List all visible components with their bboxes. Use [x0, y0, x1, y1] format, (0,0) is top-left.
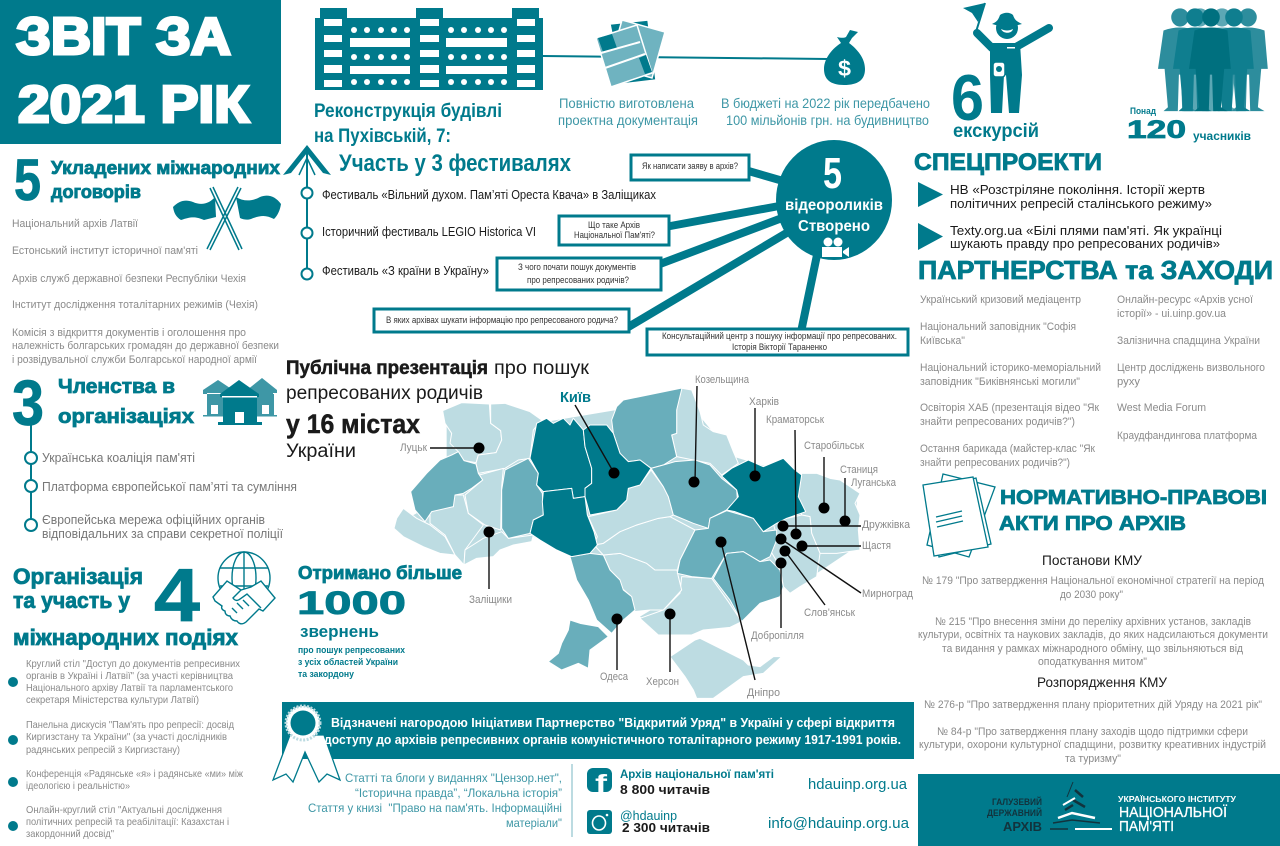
text: Texty project [950, 223, 1222, 251]
label: appeals: звернень [300, 622, 379, 641]
text: national memory institute: ПАМ'ЯТІ [1119, 818, 1174, 835]
number: 3: 3 [12, 367, 44, 439]
panel: festivals [283, 145, 656, 280]
map city labels: Станиця [840, 464, 878, 476]
video box 4 [374, 309, 629, 332]
heading: agreements [51, 158, 280, 202]
banner: award: доступу до архівів репресивних органів комуністичного тоталітарного режиму 1917-1991 років. [324, 733, 901, 747]
text: NV project [950, 182, 1212, 211]
list: events: Панельна дискусія "Пам'ять про репресії: досвід [26, 719, 234, 731]
text: facebook stats: 8 800 читачів [620, 783, 710, 797]
title panel: 2021 РІК [18, 76, 249, 134]
list: festivals: Фестиваль «З країни в Україну» [322, 263, 489, 278]
list: agreements: і розвідувальної служби Болгарської народної армії [12, 354, 257, 366]
text: state archive: ГАЛУЗЕВИЙ [992, 796, 1042, 808]
list: partners right: Онлайн-ресурс «Архів усної [1117, 294, 1253, 306]
list: memberships: Європейська мережа офіційних органів [42, 512, 265, 527]
text: project documentation: Повністю виготовлена [559, 95, 694, 111]
text: state archive: ДЕРЖАВНИЙ [987, 807, 1042, 819]
heading: reconstruction: на Пухівській, 7: [314, 126, 451, 147]
video box 2: Що таке Архів [588, 220, 640, 230]
icon: money bag: $ [838, 56, 851, 81]
icon: tree timeline [283, 145, 331, 280]
text: NV project: НВ «Розстріляне покоління. Історії жертв [950, 182, 1205, 197]
map city labels: Слов'янськ [804, 607, 855, 619]
video box 5: Консультаційний центр з пошуку інформації про репресованих. [662, 331, 897, 341]
list: partners right [1117, 294, 1265, 442]
heading: public presentation: у 16 містах [286, 409, 420, 439]
map of Ukraine [394, 374, 914, 699]
label: excursions: екскурсій [953, 121, 1039, 142]
map city labels: Старобільськ [804, 440, 864, 452]
video box 3: про репресованих родичів? [527, 275, 629, 285]
list: agreements: Інститут дослідження тоталітарних режимів (Чехія) [12, 299, 258, 311]
list: agreements: Естонський інститут історичної пам'яті [12, 245, 198, 257]
map regions [394, 388, 860, 698]
map city labels: Луганська [851, 477, 897, 489]
list: partners right: руху [1117, 376, 1141, 388]
label: participants: учасників [1193, 129, 1251, 143]
list: partners left: знайти репресованих родичів?") [920, 457, 1070, 469]
label: more than: Понад [1130, 106, 1156, 117]
text: project documentation: проектна документація [558, 112, 698, 128]
map city labels: Харків [749, 396, 779, 408]
panel: excursions [951, 3, 1049, 142]
text: articles and blogs: матеріали" [506, 816, 562, 830]
text: instagram stats [620, 808, 710, 835]
list: partners left: знайти репресованих родичів?") [920, 416, 1075, 428]
icon: facebook [587, 768, 612, 798]
panel: appeals [297, 563, 462, 680]
heading: received more than: Отримано більше [298, 563, 462, 583]
list: memberships: відповідальних за справи секретної поліції [42, 526, 283, 541]
map city labels: Дружківка [862, 519, 911, 531]
icon: documents [596, 20, 665, 87]
list: memberships: Платформа європейської пам’яті та сумління [42, 479, 297, 494]
text: Texty project: Texty.org.ua «Білі плями пам'яті. Як українці [950, 223, 1222, 238]
list: festivals [322, 187, 656, 278]
list: events: секретаря Міністерства культури Латвії) [26, 694, 199, 706]
title panel [0, 0, 281, 144]
heading: normative acts: АКТИ ПРО АРХІВ [999, 513, 1186, 535]
map city labels: Одеса [600, 671, 629, 683]
panel: social media [587, 768, 910, 835]
list: resolutions: № 179 "Про затвердження Національної економічної стратегії на період [922, 575, 1265, 587]
text: instagram stats: @hdauinp [620, 808, 677, 823]
map city labels: Козельщина [695, 374, 750, 386]
list: events: радянських репресій з Киргизстану) [26, 744, 180, 756]
heading: normative acts [999, 487, 1267, 535]
text: national memory institute: УКРАЇНСЬКОГО ІНСТИТУТУ [1118, 794, 1237, 804]
text: instagram stats: 2 300 читачів [622, 821, 710, 835]
panel: normative acts [918, 474, 1268, 765]
circle: five videos [776, 140, 892, 260]
list: agreements: Національний архів Латвії [12, 218, 138, 230]
text: budget [721, 95, 930, 128]
list: events: Конференція «Радянське «я» і радянське «ми» між [26, 768, 243, 780]
icon: money bag [824, 30, 865, 85]
heading: special projects: СПЕЦПРОЕКТИ [914, 149, 1102, 176]
video box 5: Історія Вікторії Тараненко [732, 342, 827, 352]
list: partners left: Український кризовий медіацентр [920, 294, 1081, 306]
heading: festivals: Участь у 3 фестивалях [339, 150, 572, 177]
text: state archive: АРХІВ [1003, 819, 1042, 834]
heading: public presentation: репресованих родичів [286, 383, 483, 404]
subheading: orders: Розпорядження КМУ [1037, 675, 1167, 690]
panel: partnerships [918, 255, 1273, 469]
list: orders: культури, охорони культурної спадщини, розвитку креативних індустрій [919, 739, 1266, 751]
subheading: resolutions: Постанови КМУ [1042, 553, 1142, 568]
text: articles and blogs: Стаття у книзі "Право на пам'ять. Інформаційні [308, 801, 562, 815]
map leader lines [430, 386, 861, 680]
list: events: Круглий стіл "Доступ до документів репресивних [26, 658, 241, 670]
icon: papers [923, 474, 995, 557]
list: resolutions: до 2030 року" [1060, 589, 1123, 601]
list: resolutions: та видання у рамках міжнародного обміну, що звільняються від [942, 643, 1244, 655]
heading: agreements: Укладених міжнародних [51, 158, 280, 178]
heading: events: міжнародних подіях [13, 625, 239, 650]
number: 5: 5 [14, 148, 41, 213]
number: 1000: 1000 [297, 585, 406, 621]
panel: international agreements [12, 148, 281, 366]
list: agreements: належність болгарських громадян до державної безпеки [12, 340, 279, 352]
map city labels: Краматорськ [766, 414, 824, 426]
list: events: ідеологією і реальністю» [26, 780, 130, 792]
note: appeals: та закордону [298, 669, 355, 680]
text: state archive [987, 796, 1042, 834]
text: email: info@hdauinp.org.ua [768, 815, 910, 832]
heading: events: та участь у [13, 588, 131, 613]
map city labels: Добропілля [751, 630, 804, 642]
icon: globe and handshake [213, 552, 275, 624]
map city labels: Заліщики [469, 594, 512, 606]
list: partners left: Освіторія ХАБ (презентація відео "Як [920, 402, 1099, 414]
list: events: закордонний досвід" [26, 828, 114, 840]
footer: institutions logo [918, 774, 1280, 846]
text: budget: 100 мільйонів грн. на будивництво [726, 112, 929, 128]
map city labels: Херсон [646, 676, 679, 688]
heading: reconstruction [314, 101, 502, 147]
list: resolutions [918, 575, 1268, 668]
list: partners left: Національний історико-меморіальний [920, 362, 1101, 374]
list: partners left: Остання барикада (майстер-клас "Як [920, 443, 1095, 455]
heading: public presentation: про пошук [494, 358, 590, 379]
video box 4: В яких архівах шукати інформацію про репресованого родича? [386, 315, 618, 325]
icon: facebook: f [595, 770, 608, 798]
icon: building [315, 8, 543, 90]
circle: five videos: відеороликів [785, 197, 883, 214]
icon: crowd of people [1158, 8, 1268, 111]
heading: partnerships: ПАРТНЕРСТВА та ЗАХОДИ [918, 255, 1273, 285]
list: agreements: Комісія з відкриття документів і оголошення про [12, 327, 246, 339]
heading: public presentation: України [286, 441, 356, 462]
text: website: hdauinp.org.ua [808, 776, 908, 793]
panel: international events [8, 552, 275, 840]
list: partners left [920, 294, 1101, 469]
list: events: органів в Україні і Латвії" (за участі керівництва [26, 670, 233, 682]
banner: award [273, 702, 914, 782]
icon: instagram [587, 810, 612, 834]
heading: memberships: Членства в [58, 376, 175, 398]
heading: memberships: організаціях [58, 406, 194, 428]
list: resolutions: оподаткування митом" [1038, 656, 1147, 668]
heading: normative acts: НОРМАТИВНО-ПРАВОВІ [1000, 487, 1267, 509]
list: agreements: Архів служб державної безпеки Республіки Чехія [12, 273, 246, 285]
list: resolutions: № 215 "Про внесення зміни до переліку архівних установ, закладів [935, 616, 1251, 628]
icon: houses [203, 378, 277, 425]
list: events: Киргизстану та України" (за участі дослідників [26, 731, 227, 743]
list: memberships: Українська коаліція пам'яті [42, 450, 195, 465]
list: festivals: Фестиваль «Вільний духом. Пам’яті Ореста Квача» в Заліщиках [322, 187, 656, 202]
text: national memory institute: НАЦІОНАЛЬНОЇ [1119, 804, 1228, 821]
icon: triangle [918, 182, 943, 207]
number: 120: 120 [1127, 116, 1186, 144]
list: memberships [42, 450, 297, 541]
panel: videos [374, 140, 908, 355]
list: orders [919, 699, 1266, 765]
panel: memberships [12, 367, 297, 541]
map city labels: Дніпро [747, 687, 780, 699]
panel: participants [1127, 8, 1268, 144]
list: festivals: Історичний фестиваль LEGIO Historica VI [322, 224, 536, 239]
note: appeals: з усіх областей України [298, 657, 398, 668]
circle: five videos: Створено [798, 218, 870, 235]
list: agreements [12, 218, 279, 366]
note: appeals [298, 645, 406, 680]
text: articles and blogs: “Історична правда”, “Локальна історія” [355, 786, 562, 800]
list: events [8, 658, 243, 840]
list: events: Онлайн-круглий стіл "Актуальні дослідження [26, 804, 222, 816]
list: partners right: Краудфандингова платформа [1117, 430, 1258, 442]
map city labels: Луцьк [400, 442, 427, 454]
timeline: memberships [25, 420, 37, 531]
video box 1: Як написати заяву в архів? [642, 161, 738, 171]
icon: triangle [918, 223, 943, 250]
map city labels: Київ [560, 389, 591, 406]
list: orders: № 84-р "Про затвердження плану заходів щодо підтримки сфери [937, 726, 1248, 738]
video box 1 [631, 155, 749, 180]
text: facebook stats [620, 769, 774, 797]
text: project documentation [558, 95, 698, 128]
number: 6: 6 [951, 61, 984, 134]
text: NV project: політичних репресій сталінського режиму» [950, 196, 1212, 211]
text: articles and blogs [308, 771, 562, 830]
text: national memory institute [1118, 794, 1237, 835]
video box 5 [647, 329, 908, 355]
list: partners left: Київська" [920, 335, 965, 347]
text: facebook stats: Архів національної пам'яті [620, 769, 774, 781]
text: Texty project: шукають правду про репресованих родичів» [950, 236, 1220, 251]
title panel: ЗВІТ ЗА [16, 8, 231, 66]
list: events: Національного архіву Латвії та парламентського [26, 682, 233, 694]
heading: memberships [58, 376, 194, 428]
text: budget: В бюджеті на 2022 рік передбачено [721, 95, 930, 111]
heading: public presentation [286, 358, 590, 462]
list: partners right: історії» - ui.uinp.gov.ua [1117, 308, 1227, 320]
video box 3 [497, 258, 661, 290]
banner: award: Відзначені нагородою Ініціативи Партнерство "Відкритий Уряд" в Україні у сфері відкриття [331, 716, 895, 730]
map city labels: Щастя [862, 540, 891, 552]
panel: special projects [914, 149, 1222, 251]
map city labels [400, 374, 914, 699]
icon: ribbon medal [273, 706, 340, 782]
heading: public presentation: Публічна презентація [286, 358, 488, 379]
heading: events [13, 564, 239, 650]
list: partners right: West Media Forum [1117, 402, 1206, 414]
list: events: політичних репресій та реабілітації: Казахстан і [26, 816, 229, 828]
list: orders: № 276-р "Про затвердження плану пріоритетних дій Уряду на 2021 рік" [924, 699, 1262, 711]
heading: agreements: договорів [51, 182, 141, 202]
heading: events: Організація [13, 564, 143, 589]
list: partners left: Національний заповідник "Софія [920, 321, 1076, 333]
list: partners right: Залізнична спадщина України [1117, 335, 1260, 347]
map city labels: Мирноград [862, 588, 914, 600]
icon: logo tree [1050, 782, 1112, 829]
heading: reconstruction: Реконструкція будівлі [314, 101, 502, 122]
video box 2: Національної Пам'яті? [574, 230, 655, 240]
number: 4: 4 [154, 553, 200, 637]
map city dots [474, 442, 850, 624]
video box 3: З чого почати пошук документів [518, 262, 636, 272]
video box 2 [559, 216, 669, 245]
circle: five videos: 5 [823, 149, 842, 198]
panel: reconstruction of the building [314, 8, 930, 147]
icon: crossed flags [173, 187, 281, 250]
text: articles and blogs: Статті та блоги у виданнях "Цензор.нет", [345, 771, 562, 785]
list: partners right: Центр досліджень визвольного [1117, 362, 1265, 374]
icon: guide figure [963, 3, 1049, 113]
icon: film camera [822, 238, 849, 257]
list: partners left: заповідник "Биківнянські могили" [920, 376, 1080, 388]
connector spokes [625, 170, 817, 332]
list: orders: та туризму" [1065, 753, 1121, 765]
note: appeals: про пошук репресованих [298, 645, 406, 656]
